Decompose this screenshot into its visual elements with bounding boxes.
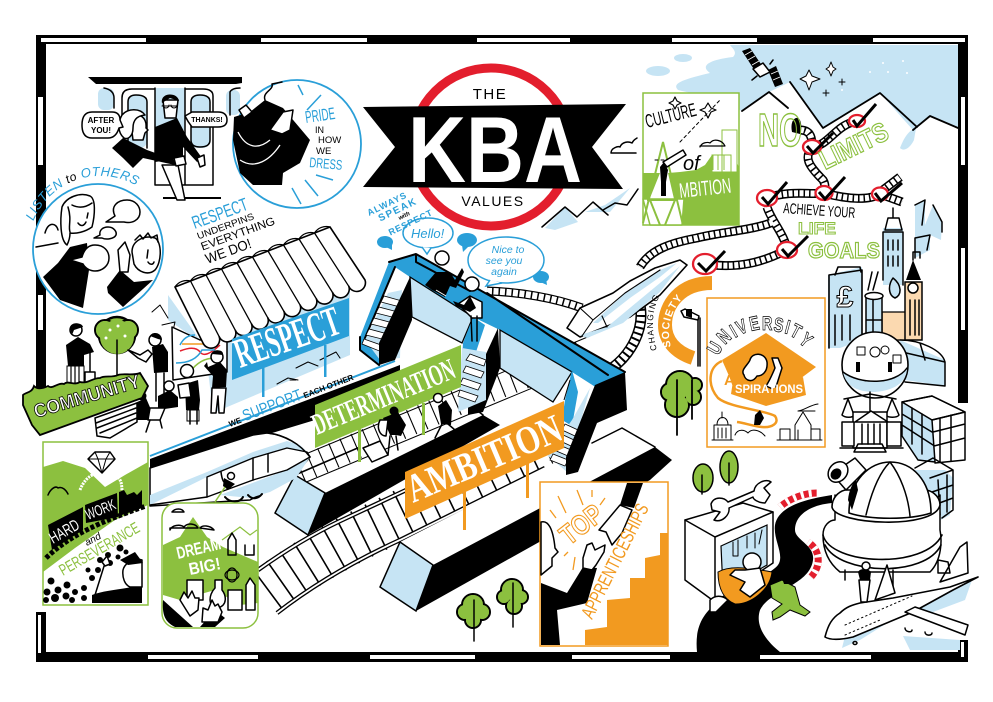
tail fins bbox=[938, 542, 968, 582]
changing society arc bbox=[647, 276, 712, 365]
hard work and perseverance panel: HARD bbox=[46, 517, 83, 547]
woman bbox=[112, 110, 186, 168]
rocks bbox=[43, 544, 128, 603]
KBA logo bbox=[363, 68, 626, 226]
hard work and perseverance panel: PERSEVERANCE bbox=[56, 520, 143, 579]
glass cubes bbox=[902, 396, 965, 522]
university lettering: T bbox=[787, 319, 806, 343]
black skyline bbox=[119, 490, 142, 516]
ribbon bbox=[363, 104, 626, 189]
university lettering: V bbox=[733, 314, 751, 339]
determination sign: DETERMINATION bbox=[307, 353, 460, 441]
observatory bbox=[823, 458, 942, 590]
small trees near toolbox bbox=[693, 451, 738, 494]
listen to others label: LISTEN to OTHERS bbox=[26, 166, 140, 221]
path edge bbox=[46, 506, 146, 558]
backpack person bbox=[185, 380, 200, 410]
achieve your life goals text: LIFE bbox=[798, 219, 836, 238]
university lettering bbox=[702, 311, 817, 358]
always speak with respect bbox=[366, 183, 434, 242]
globe bbox=[842, 332, 908, 398]
digging man bbox=[92, 585, 142, 603]
we support each other: EACH OTHER bbox=[302, 373, 355, 400]
stars bbox=[800, 60, 908, 96]
university lettering: S bbox=[772, 313, 785, 337]
respect sign bbox=[228, 298, 349, 397]
city dome bbox=[842, 332, 945, 398]
bench bbox=[95, 403, 137, 438]
second span pillar bbox=[468, 328, 500, 415]
changing society arc: CHANGING bbox=[647, 295, 658, 350]
pound tower bbox=[828, 267, 862, 348]
university lettering: I bbox=[783, 315, 793, 338]
pilot figure bbox=[859, 580, 870, 602]
respect underpins text bbox=[189, 187, 282, 267]
platform 1 edge bbox=[150, 361, 400, 470]
achieve your life goals text: GOALS bbox=[808, 238, 880, 263]
respect underpins text: UNDERPINS bbox=[196, 211, 256, 242]
no limits text bbox=[758, 104, 893, 175]
windows bbox=[98, 88, 240, 148]
KBA logo: THE bbox=[473, 86, 507, 103]
apprenticeships panel bbox=[540, 482, 668, 646]
nice to see you bubble: again bbox=[491, 266, 517, 278]
listening man bbox=[107, 270, 153, 307]
solid bubbles bbox=[377, 233, 549, 285]
track outlines bbox=[640, 121, 902, 267]
after you bubble: YOU! bbox=[91, 126, 111, 135]
hard work and perseverance panel: WORK bbox=[83, 496, 118, 524]
awning wall bbox=[152, 290, 350, 413]
platform 2 block bbox=[275, 405, 500, 535]
listen circle bbox=[33, 184, 163, 314]
culture of ambition panel: CULTURE bbox=[643, 100, 699, 133]
cloud bbox=[170, 509, 214, 530]
we support each other: WE bbox=[227, 416, 243, 429]
hands and arms bbox=[163, 600, 225, 627]
no limits text: NO bbox=[758, 104, 802, 156]
top text: TOP bbox=[554, 498, 609, 551]
pointing man bbox=[204, 362, 227, 388]
driver bbox=[223, 478, 235, 490]
ambition sign: AMBITION bbox=[399, 405, 568, 511]
culture of ambition panel: of bbox=[683, 153, 702, 175]
right pillar bbox=[566, 372, 627, 475]
middle stairs bbox=[458, 348, 486, 412]
mortar board bbox=[722, 333, 816, 405]
dream big panel: BIG! bbox=[187, 554, 222, 579]
big ben bbox=[905, 282, 922, 340]
bubbles bbox=[106, 200, 140, 223]
hard work and perseverance panel: and bbox=[83, 531, 104, 549]
platform 3 block bbox=[380, 428, 672, 611]
sky background bbox=[646, 45, 958, 150]
upper right train bbox=[567, 260, 687, 338]
man bbox=[155, 94, 205, 200]
pride circle: DRESS bbox=[309, 154, 343, 173]
lamp post bbox=[681, 309, 700, 366]
person watering bbox=[152, 344, 168, 373]
green hills bbox=[43, 461, 148, 572]
nice to see you bubble: see you bbox=[486, 255, 523, 267]
apprenticeships panel: APPRENTICESHIPS bbox=[578, 500, 654, 622]
listening woman bbox=[43, 243, 89, 308]
person with spade bbox=[66, 337, 94, 366]
nice to see you bubble: Nice to bbox=[492, 244, 524, 256]
achieve your life goals text: ACHIEVE YOUR bbox=[783, 200, 856, 222]
respect underpins text: EVERYTHING bbox=[199, 216, 277, 253]
mountain ridge bbox=[742, 82, 958, 130]
thanks bubble: THANKS! bbox=[191, 117, 223, 124]
small running figure bbox=[754, 410, 764, 425]
pride circle: IN bbox=[315, 125, 324, 135]
work sign bbox=[85, 493, 118, 523]
steps bbox=[585, 533, 668, 645]
university panel bbox=[702, 298, 825, 447]
skyline bbox=[187, 578, 255, 610]
tunnel bbox=[791, 118, 801, 134]
respect underpins text: RESPECT bbox=[189, 194, 251, 233]
determination sign bbox=[307, 345, 461, 462]
first span pillar bbox=[379, 277, 412, 365]
community bush: COMMUNITY bbox=[31, 371, 143, 423]
court building and scales bbox=[840, 392, 903, 452]
hard work and perseverance panel bbox=[43, 442, 148, 605]
small cloud and mountains bbox=[542, 138, 638, 230]
skyline at base bbox=[712, 412, 822, 440]
hard sign bbox=[48, 507, 83, 550]
road bbox=[697, 493, 832, 652]
distant railway curve bbox=[487, 291, 641, 368]
hello bubble: Hello! bbox=[411, 226, 445, 241]
spanner bbox=[711, 481, 771, 521]
blue skyline silhouettes bbox=[915, 200, 942, 258]
travellers on platform bbox=[363, 394, 455, 462]
university lettering: E bbox=[747, 311, 761, 335]
pride circle: PRIDE bbox=[304, 104, 336, 127]
university panel: SPIRATIONS bbox=[735, 382, 803, 396]
figure bbox=[541, 567, 597, 645]
telescope bbox=[832, 458, 866, 490]
main wing bbox=[905, 607, 968, 635]
trees at bottom centre bbox=[457, 579, 528, 641]
green mountains bbox=[163, 517, 258, 605]
always speak with respect: ALWAYS bbox=[366, 190, 409, 218]
tree by university bbox=[661, 371, 702, 435]
london skyline: £ bbox=[837, 281, 854, 314]
respect underpins text: WE DO! bbox=[203, 235, 253, 267]
torso bbox=[233, 100, 310, 185]
fuselage bbox=[825, 577, 978, 639]
satellite bbox=[742, 48, 783, 87]
dream big panel: DREAM bbox=[175, 534, 223, 563]
no limits text: LIMITS bbox=[814, 116, 893, 175]
university lettering: U bbox=[702, 338, 727, 358]
pride circle bbox=[233, 80, 361, 208]
KBA logo: KBA bbox=[408, 97, 582, 202]
changing society arc: SOCIETY bbox=[662, 294, 681, 348]
thanks bubble bbox=[185, 112, 227, 127]
university lettering: I bbox=[726, 320, 741, 342]
right glass roof bbox=[900, 340, 945, 386]
footbridge bbox=[360, 254, 627, 475]
always speak with respect: RESPECT bbox=[387, 207, 434, 237]
train doors scene bbox=[82, 77, 242, 200]
university panel: A bbox=[724, 372, 735, 389]
culture of ambition panel: MBITION bbox=[678, 175, 732, 203]
right stairs bbox=[547, 388, 590, 472]
tree bbox=[95, 317, 138, 375]
front wing bbox=[875, 565, 895, 600]
we support each other: SUPPORT bbox=[240, 387, 304, 425]
community group people bbox=[66, 317, 227, 432]
university lettering: Y bbox=[795, 328, 817, 352]
people on the bridge bbox=[425, 251, 482, 341]
achieve your life goals text bbox=[783, 200, 880, 263]
london skyline bbox=[828, 200, 942, 348]
bridge walkway band bbox=[360, 254, 625, 388]
after you bubble: AFTER bbox=[88, 116, 115, 125]
main railway tracks bbox=[258, 336, 590, 613]
after you bubble bbox=[82, 112, 123, 138]
motorcycle and mechanic bbox=[710, 553, 810, 620]
pride circle: HOW bbox=[318, 135, 341, 146]
lower train bbox=[150, 433, 310, 506]
route map poster bbox=[172, 327, 227, 380]
always speak with respect: with bbox=[398, 211, 411, 222]
speech bubbles on bridge bbox=[377, 218, 549, 286]
diamond bbox=[88, 452, 115, 473]
brick marks bbox=[152, 305, 340, 384]
red and white kerbs bbox=[780, 493, 818, 577]
respect sign: RESPECT bbox=[228, 298, 346, 377]
parliament bbox=[882, 312, 907, 340]
always speak with respect: SPEAK bbox=[377, 196, 419, 224]
tall tower bbox=[883, 228, 903, 285]
plane bbox=[825, 542, 978, 650]
railway to goals bbox=[640, 104, 902, 274]
dream big panel bbox=[162, 487, 258, 628]
awning top bumps bbox=[175, 227, 330, 287]
reaching hand bbox=[620, 483, 643, 508]
KBA logo: VALUES bbox=[461, 193, 525, 209]
gherkin bbox=[889, 278, 900, 298]
we support each other bbox=[225, 367, 356, 431]
awning bbox=[175, 227, 365, 348]
university lettering: N bbox=[712, 325, 736, 348]
goal checks bbox=[693, 115, 888, 274]
toolbox bbox=[685, 481, 773, 602]
seated people bbox=[158, 390, 178, 410]
nice to see you bubble bbox=[468, 237, 544, 286]
hello bubble bbox=[403, 218, 453, 254]
ambition sign bbox=[399, 401, 568, 530]
red ring bbox=[412, 68, 570, 226]
university lettering: R bbox=[762, 312, 773, 335]
carriage roof bbox=[88, 77, 242, 84]
cylinder bbox=[866, 297, 882, 342]
pride circle: WE bbox=[316, 146, 331, 157]
culture of ambition panel bbox=[643, 93, 739, 225]
left stairs bbox=[362, 290, 402, 360]
